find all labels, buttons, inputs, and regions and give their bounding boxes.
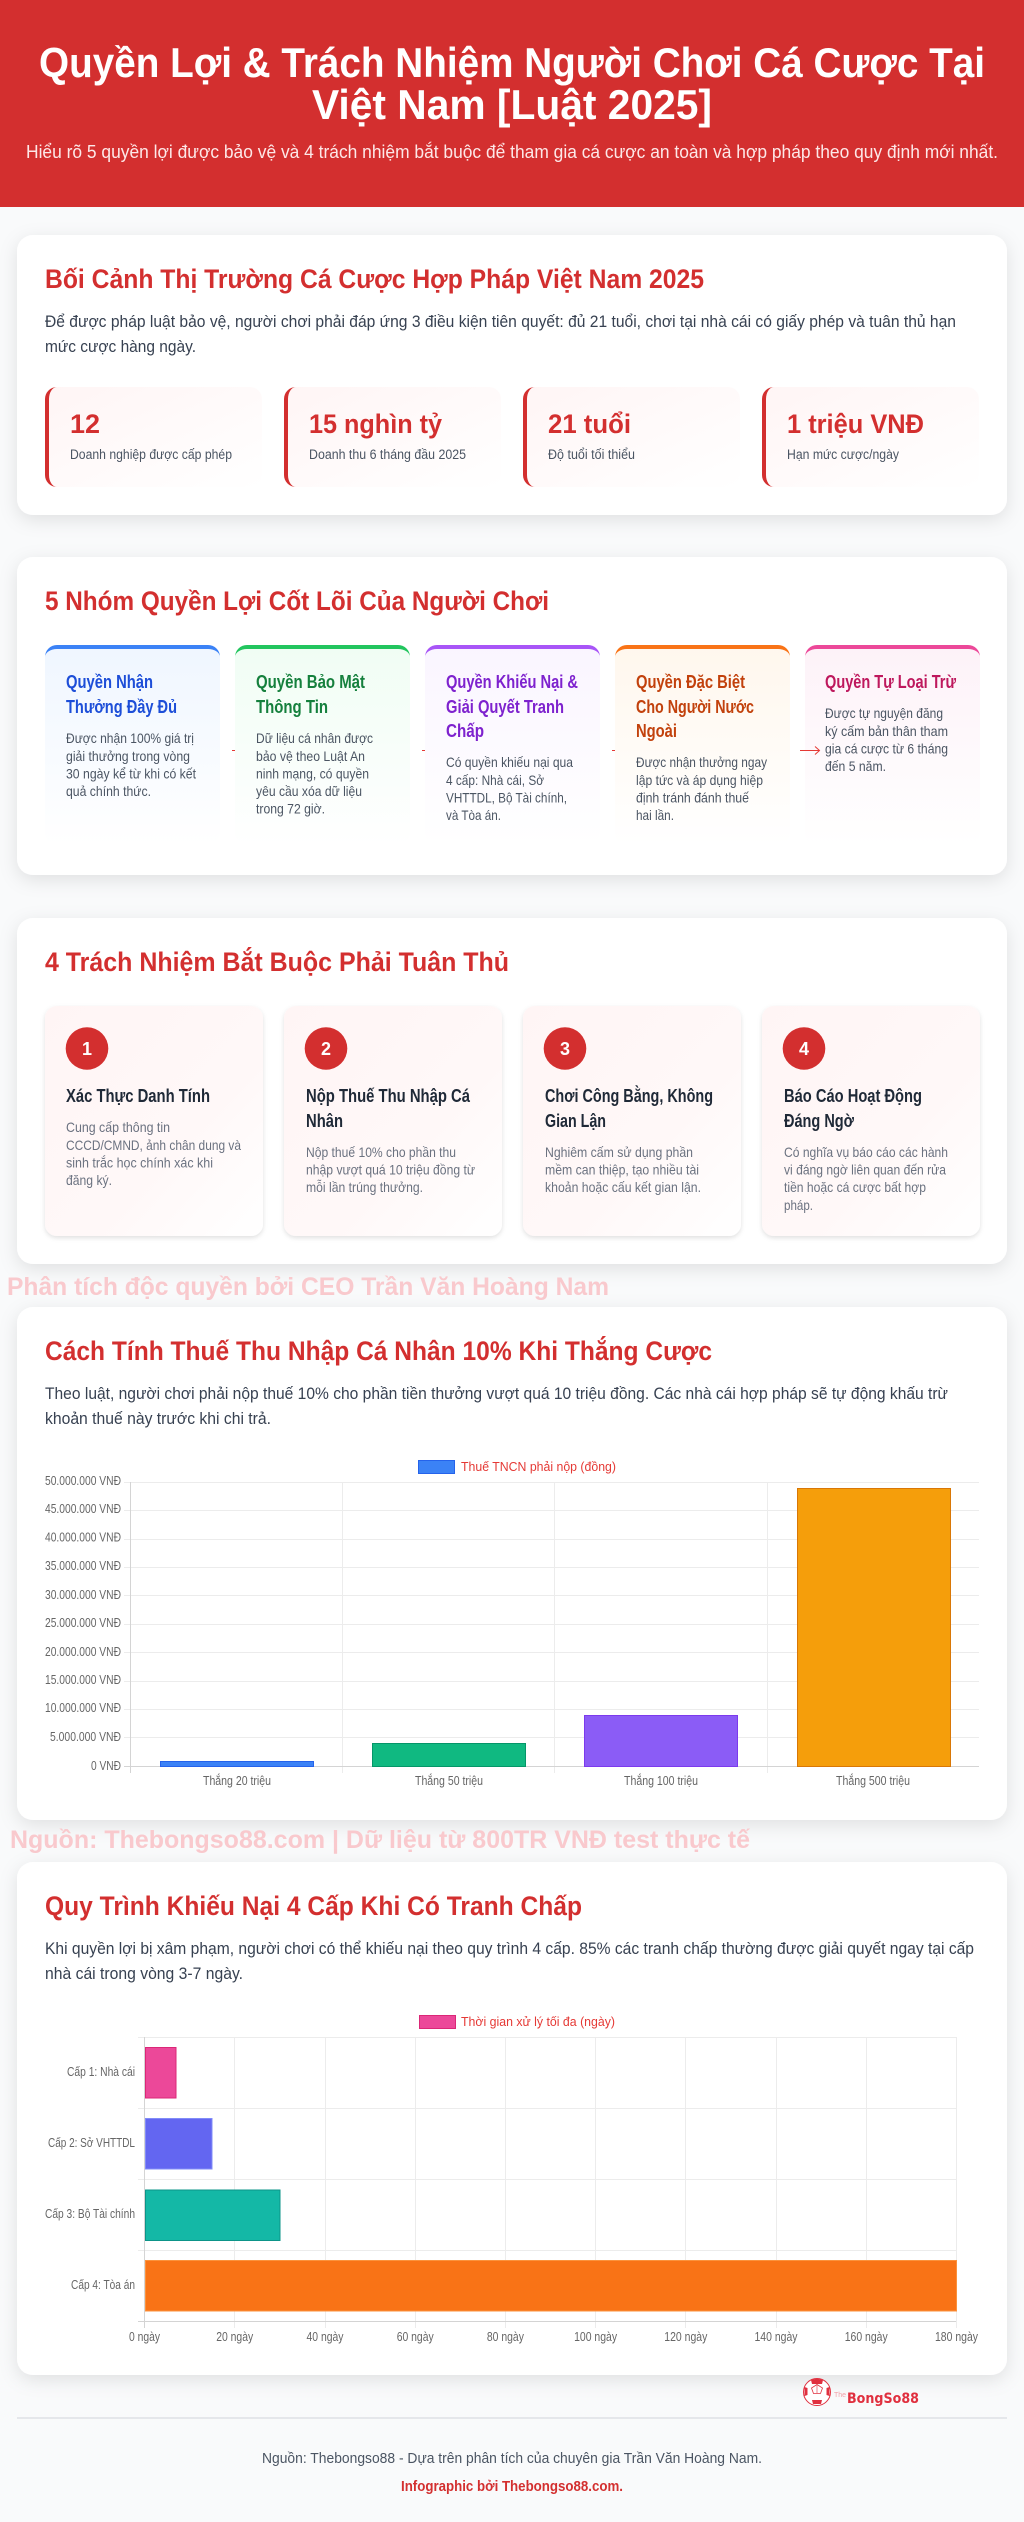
heading: complaint process: Quy Trình Khiếu Nại 4 Cấp Khi Có Tranh Chấp [45, 1891, 582, 1921]
responsibility card 3: Nghiêm cấm sử dụng phần [545, 1144, 693, 1160]
responsibility card 3: mềm can thiệp, tạo nhiều tài [545, 1162, 699, 1178]
right card: complaint: Quyền Khiếu Nại & [446, 672, 578, 692]
axis: x labels: 60 ngày [397, 2330, 434, 2344]
footer [17, 2417, 1007, 2495]
axis: y labels: 0 VNĐ [91, 1759, 121, 1773]
right card: foreigners: Quyền Đặc Biệt [636, 672, 745, 692]
axis: y labels [45, 1474, 121, 1773]
responsibility card 4: Có nghĩa vụ báo cáo các hành [784, 1144, 948, 1160]
responsibility card 1: 1 [82, 1039, 92, 1059]
right card: foreigners: Ngoài [636, 721, 677, 741]
right card: foreigners: định tránh đánh thuế [636, 790, 749, 806]
right card: complaint: và Tòa án. [446, 807, 501, 823]
right card: reward: Quyền Nhận [66, 672, 153, 692]
responsibility card 1: Xác Thực Danh Tính [66, 1086, 210, 1106]
bar: level 3 [146, 2190, 280, 2240]
axis: x labels [129, 2330, 979, 2344]
responsibility card 1: đăng ký. [66, 1172, 112, 1188]
legend: days: Thời gian xử lý tối đa (ngày) [461, 2015, 615, 2029]
responsibility card 3: Chơi Công Bằng, Không [545, 1085, 713, 1106]
panel: market context [17, 235, 1007, 515]
axis: y labels: 25.000.000 VNĐ [45, 1616, 121, 1630]
axis: y labels: Cấp 3: Bộ Tài chính [45, 2207, 135, 2221]
logo: TheBongSo88: BongSo88 [847, 2391, 919, 2407]
right card: self exclusion [805, 645, 980, 845]
responsibility card 4: vi đáng ngờ liên quan đến rửa [784, 1162, 946, 1178]
bar: 50 million [372, 1744, 526, 1766]
right card: reward: 30 ngày kể từ khi có kết [66, 766, 196, 782]
right card: privacy: trong 72 giờ. [256, 800, 325, 816]
responsibility card 4: tiền hoặc cá cược bất hợp [784, 1179, 926, 1195]
right card: foreigners: Được nhận thưởng ngay [636, 754, 767, 770]
axis: x labels: Thắng 20 triệu [203, 1773, 271, 1788]
bar: level 2 [146, 2118, 212, 2169]
bar chart: personal income tax [45, 1460, 979, 1788]
text block: market context: Để được pháp luật bảo vệ, người chơi phải đáp ứng 3 điều kiện tiên quyết: đủ 21 tuổi, chơi tại nhà cái có giấy phép và tuân thủ hạn [45, 313, 956, 331]
text block: tax calculation: Theo luật, người chơi phải nộp thuế 10% cho phần tiền thưởng vượt quá 10 triệu đồng. Các nhà cái hợp pháp sẽ tự động khấu trừ [45, 1385, 948, 1403]
right card: complaint: 4 cấp: Nhà cái, Sở [446, 772, 544, 788]
right card: complaint: Có quyền khiếu nại qua [446, 754, 573, 770]
bar: 500 million [798, 1488, 950, 1766]
right card: reward: Được nhận 100% giá trị [66, 730, 194, 746]
right card: privacy: ninh mạng, có quyền [256, 766, 369, 782]
responsibility card 3 [523, 1006, 741, 1236]
stat card: 1 triệu VNĐ: Hạn mức cược/ngày [787, 447, 899, 462]
axis: y labels: 45.000.000 VNĐ [45, 1502, 121, 1516]
responsibility card 2 [284, 1006, 502, 1236]
stat card: 12 [45, 387, 262, 487]
axis: x labels: Thắng 100 triệu [624, 1773, 698, 1788]
right card: privacy: Thông Tin [256, 697, 328, 717]
stat card: 21 tuổi: 21 tuổi [548, 409, 631, 439]
text block: complaint process: Khi quyền lợi bị xâm phạm, người chơi có thể khiếu nại theo quy trình 4 cấp. 85% các tranh chấp thường được giải quyết ngay tại cấp [45, 1940, 974, 1958]
axis: x labels: 180 ngày [935, 2330, 979, 2344]
right card: self exclusion: gia cá cược từ 6 tháng [825, 740, 948, 756]
right card: foreigners: hai lần. [636, 807, 674, 823]
heading: tax calculation: Cách Tính Thuế Thu Nhập Cá Nhân 10% Khi Thắng Cược [45, 1335, 712, 1366]
axis: y labels: Cấp 2: Sở VHTTDL [48, 2136, 135, 2150]
axis: y labels: 50.000.000 VNĐ [45, 1474, 121, 1488]
responsibility card 4: Đáng Ngờ [784, 1111, 854, 1131]
text block: market context [45, 313, 956, 356]
arrow: reward to privacy [232, 750, 235, 751]
axis: y labels: 15.000.000 VNĐ [45, 1673, 121, 1687]
right card: self exclusion: Được tự nguyện đăng [825, 705, 943, 721]
axis: x labels: 100 ngày [574, 2330, 618, 2344]
right card: reward [45, 645, 220, 845]
responsibility card 1 [45, 1006, 263, 1236]
text block: complaint process [45, 1940, 974, 1983]
title: Việt Nam [Luật 2025] [312, 81, 712, 128]
axis: y labels: 30.000.000 VNĐ [45, 1588, 121, 1602]
right card: self exclusion: ký cấm bản thân tham [825, 723, 948, 739]
responsibility card 2: Nhân [306, 1111, 343, 1131]
right card: self exclusion: đến 5 năm. [825, 758, 886, 774]
responsibility card 1: sinh trắc học chính xác khi [66, 1154, 213, 1170]
heading: five rights: 5 Nhóm Quyền Lợi Cốt Lõi Của Người Chơi [45, 586, 549, 616]
responsibility card 3: 3 [560, 1039, 570, 1059]
axis: x labels: 80 ngày [487, 2330, 525, 2344]
axis: y labels: 10.000.000 VNĐ [45, 1701, 121, 1715]
stat card: 15 nghìn tỷ [284, 387, 501, 487]
bar chart: maximum handling time [45, 2015, 979, 2344]
responsibility card 2: Nộp Thuế Thu Nhập Cá [306, 1086, 471, 1106]
stat card: 21 tuổi: Độ tuổi tối thiểu [548, 447, 635, 462]
text block: market context: mức cược hàng ngày. [45, 338, 196, 356]
axis: y labels: 40.000.000 VNĐ [45, 1530, 121, 1544]
responsibility card 4 [762, 1006, 980, 1236]
responsibility card 2: nhập vượt quá 10 triệu đồng từ [306, 1162, 475, 1178]
legend: tax: Thuế TNCN phải nộp (đồng) [461, 1460, 616, 1474]
axis: x labels: 20 ngày [216, 2330, 254, 2344]
text block: complaint process: nhà cái trong vòng 3-7 ngày. [45, 1965, 243, 1983]
axis: y labels: 20.000.000 VNĐ [45, 1645, 121, 1659]
logo: TheBongSo88: The [834, 2392, 846, 2399]
text block: tax calculation [45, 1385, 948, 1428]
panel: complaint process [17, 1862, 1007, 2375]
bar: 20 million [160, 1762, 314, 1766]
responsibility card 4: Báo Cáo Hoạt Động [784, 1086, 922, 1106]
stat card: 1 triệu VNĐ: 1 triệu VNĐ [787, 409, 924, 439]
right card: reward: giải thưởng trong vòng [66, 748, 190, 764]
axis: x labels: 120 ngày [664, 2330, 708, 2344]
axis: y labels: 5.000.000 VNĐ [50, 1730, 121, 1744]
axis: x labels [203, 1773, 910, 1788]
responsibility card 1: Cung cấp thông tin [66, 1119, 170, 1135]
right card: complaint: VHTTDL, Bộ Tài chính, [446, 790, 567, 806]
right card: foreigners: lập tức và áp dụng hiệp [636, 772, 763, 788]
right card: reward: quả chính thức. [66, 783, 151, 799]
logo: TheBongSo88 [804, 2378, 919, 2407]
heading: market context: Bối Cảnh Thị Trường Cá Cược Hợp Pháp Việt Nam 2025 [45, 264, 704, 294]
responsibility card 3: khoản hoặc cấu kết gian lận. [545, 1179, 701, 1195]
bar: level 1 [146, 2048, 176, 2098]
right card: privacy: bảo vệ theo Luật An [256, 748, 365, 764]
responsibility card 2: Nộp thuế 10% cho phần thu [306, 1144, 456, 1160]
right card: self exclusion: Quyền Tự Loại Trừ [825, 672, 957, 692]
text block: tax calculation: khoản thuế này trước khi chi trả. [45, 1410, 271, 1428]
bar: level 4 [146, 2260, 956, 2311]
responsibility card 4: pháp. [784, 1197, 813, 1213]
footer: source: Nguồn: Thebongso88 - Dựa trên phân tích của chuyên gia Trần Văn Hoàng Nam. [262, 2451, 762, 2467]
stat card: 1 triệu VNĐ [762, 387, 979, 487]
header banner [0, 0, 1024, 207]
responsibility card 3: Gian Lận [545, 1111, 606, 1131]
right card: complaint: Chấp [446, 721, 484, 741]
stat card: 15 nghìn tỷ: 15 nghìn tỷ [309, 409, 442, 439]
axis: x labels: Thắng 50 triệu [415, 1773, 483, 1788]
axis: x labels: 140 ngày [754, 2330, 798, 2344]
responsibility card 2: mỗi lần trúng thưởng. [306, 1179, 423, 1195]
axis: y labels: Cấp 1: Nhà cái [67, 2065, 135, 2079]
axis: y labels: Cấp 4: Tòa án [71, 2278, 135, 2292]
panel: tax calculation [17, 1307, 1007, 1820]
axis: y labels [45, 2065, 135, 2292]
right card: privacy: Dữ liệu cá nhân được [256, 730, 373, 746]
arrow: complaint to foreigners [612, 750, 615, 751]
watermark: source: Nguồn: Thebongso88.com | Dữ liệu từ 800TR VNĐ test thực tế [10, 1826, 750, 1854]
arrow: privacy to complaint [422, 750, 425, 751]
axis: y labels: 35.000.000 VNĐ [45, 1559, 121, 1573]
panel: five rights [17, 557, 1007, 875]
right card: foreigners: Cho Người Nước [636, 697, 754, 717]
right card: complaint [425, 645, 600, 845]
right card: privacy: yêu cầu xóa dữ liệu [256, 783, 362, 799]
responsibility card 1: CCCD/CMND, ảnh chân dung và [66, 1137, 241, 1153]
heading: four responsibilities: 4 Trách Nhiệm Bắt Buộc Phải Tuân Thủ [45, 946, 509, 977]
axis: x labels: Thắng 500 triệu [836, 1773, 910, 1788]
arrow: foreigners to self exclusion [800, 746, 820, 754]
responsibility card 4: 4 [799, 1039, 809, 1059]
stat card: 12: Doanh nghiệp được cấp phép [70, 447, 232, 462]
footer: credit: Infographic bởi Thebongso88.com. [401, 2479, 623, 2495]
responsibility card 2: 2 [321, 1039, 331, 1059]
stat card: 21 tuổi [523, 387, 740, 487]
axis: x labels: 40 ngày [306, 2330, 344, 2344]
right card: complaint: Giải Quyết Tranh [446, 697, 564, 717]
watermark: CEO analysis: Phân tích độc quyền bởi CEO Trần Văn Hoàng Nam [7, 1273, 609, 1301]
right card: privacy: Quyền Bảo Mật [256, 672, 365, 692]
right card: foreigners [615, 645, 790, 845]
axis: x labels: 160 ngày [845, 2330, 888, 2344]
panel: four responsibilities [17, 918, 1007, 1264]
right card: reward: Thưởng Đầy Đủ [66, 697, 177, 717]
right card: privacy [235, 645, 410, 845]
axis: x labels: 0 ngày [129, 2330, 161, 2344]
stat card: 12: 12 [70, 409, 100, 439]
stat card: 15 nghìn tỷ: Doanh thu 6 tháng đầu 2025 [309, 447, 466, 462]
title [39, 39, 985, 128]
bar: 100 million [584, 1716, 738, 1766]
